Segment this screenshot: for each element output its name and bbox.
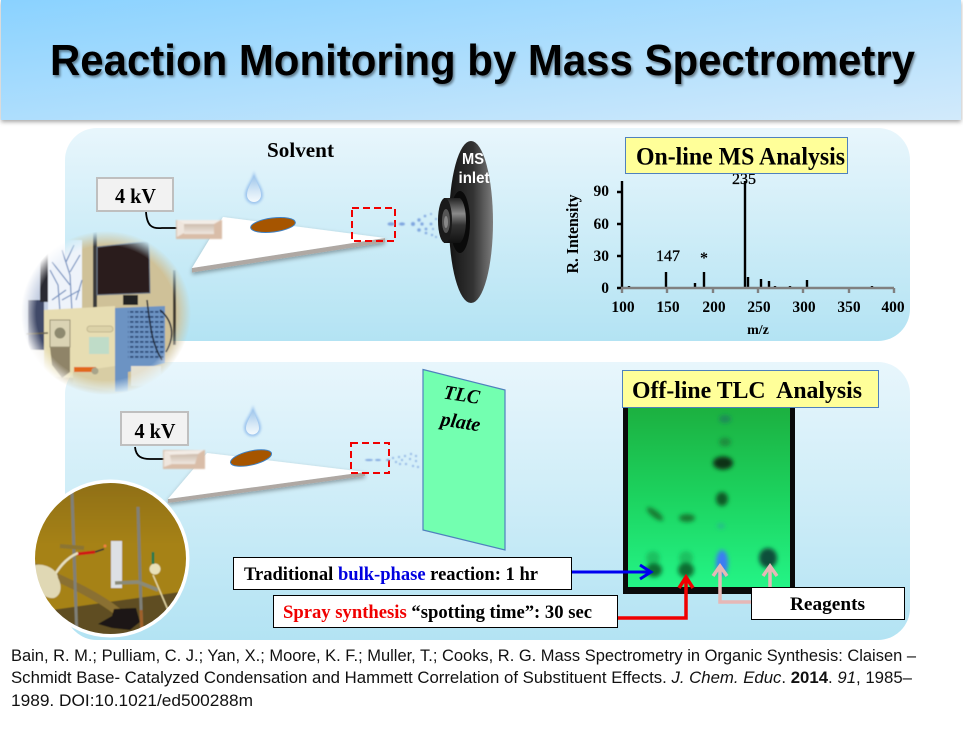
TLC image: [623, 400, 795, 594]
solvent label: Solvent: [267, 138, 334, 162]
y tick labels: 90: [594, 183, 609, 200]
plate label: TLC: [442, 382, 482, 409]
voltage clip: [163, 450, 205, 469]
peak label star: *: [700, 250, 708, 267]
bottom apparatus: [121, 370, 505, 550]
y tick labels: 0: [601, 280, 609, 297]
top apparatus: [97, 138, 493, 303]
callout: spray synthesis: Spray synthesis “spotting time”: 30 sec: [283, 603, 592, 623]
wire: [146, 212, 178, 228]
citation: 1989. DOI:10.1021/ed500288m: [11, 691, 253, 710]
solvent drop: [245, 171, 263, 204]
photo: spray synthesis setup: [30, 478, 192, 643]
sample spot: [250, 215, 296, 235]
y axis: [617, 181, 622, 289]
voltage clip: [176, 220, 222, 239]
label: off-line TLC analysis: [622, 370, 878, 408]
label: on-line MS analysis: On-line MS Analysis: [636, 144, 845, 170]
citation: [11, 646, 917, 710]
x tick labels: 350: [837, 299, 861, 316]
solvent drop: [244, 405, 261, 436]
x tick labels: 400: [881, 299, 905, 316]
plate label: plate: [437, 408, 482, 436]
x axis title: m/z: [747, 323, 769, 338]
spray region marker: [352, 208, 395, 241]
callout: reagents: [752, 588, 904, 620]
spray region marker: [351, 443, 389, 473]
panel: off-line TLC: [65, 362, 910, 640]
inlet label: inlet: [458, 170, 490, 187]
y axis title: R. Intensity: [563, 194, 582, 274]
voltage box: 4 kV: [134, 419, 176, 443]
x tick labels: 250: [747, 299, 771, 316]
citation: Bain, R. M.; Pulliam, C. J.; Yan, X.; Moore, K. F.; Muller, T.; Cooks, R. G. Mass Spectrometry in Organic Synthesis: Claisen –: [11, 646, 917, 665]
spray droplets: [365, 453, 419, 468]
wire: [135, 447, 166, 459]
arrow: spray result: [618, 577, 693, 618]
voltage box: [97, 178, 173, 211]
title: Reaction Monitoring by Mass Spectrometry: [50, 36, 915, 85]
x tick labels: 100: [611, 299, 635, 316]
callout: reagents: Reagents: [790, 595, 865, 615]
x tick labels: 200: [702, 299, 726, 316]
peak label 147: 147: [656, 248, 680, 265]
arrow: reagents to spot 4: [763, 566, 777, 588]
x tick labels: 300: [792, 299, 816, 316]
callout: spray synthesis: [274, 596, 618, 628]
title banner: [1, 0, 961, 120]
citation: Schmidt Base- Catalyzed Condensation and Hammett Correlation of Substituent Effects. J. Chem. Educ. 2014. 91, 1985–: [11, 668, 913, 687]
MS inlet: [438, 141, 493, 303]
voltage box: [121, 412, 188, 445]
y tick labels: 30: [594, 248, 609, 265]
spray droplets: [388, 213, 437, 238]
glass slide: [192, 217, 385, 272]
sample spot: [229, 446, 273, 470]
panel: on-line MS: [65, 128, 910, 341]
arrow: reagents to spot 3: [713, 566, 751, 602]
spots: [645, 415, 777, 578]
photo: mass spectrometer instrument: [23, 232, 190, 394]
x tick labels: 150: [656, 299, 680, 316]
label: on-line MS analysis: [626, 138, 848, 174]
x axis: [621, 288, 894, 293]
voltage box: 4 kV: [115, 184, 156, 208]
TLC plate: [423, 370, 505, 550]
inlet label: MS: [462, 151, 484, 168]
peaks: [629, 181, 872, 288]
y tick labels: 60: [594, 216, 609, 233]
mass spectrum chart: [563, 171, 905, 338]
label: off-line TLC analysis: Off-line TLC Analysis: [632, 378, 862, 404]
peak label 235: 235: [732, 171, 756, 188]
callout: traditional bulk-phase: [234, 558, 572, 590]
arrow: traditional result: [571, 565, 651, 579]
callout: traditional bulk-phase: Traditional bulk-phase reaction: 1 hr: [244, 565, 538, 585]
glass slide: [168, 453, 365, 503]
